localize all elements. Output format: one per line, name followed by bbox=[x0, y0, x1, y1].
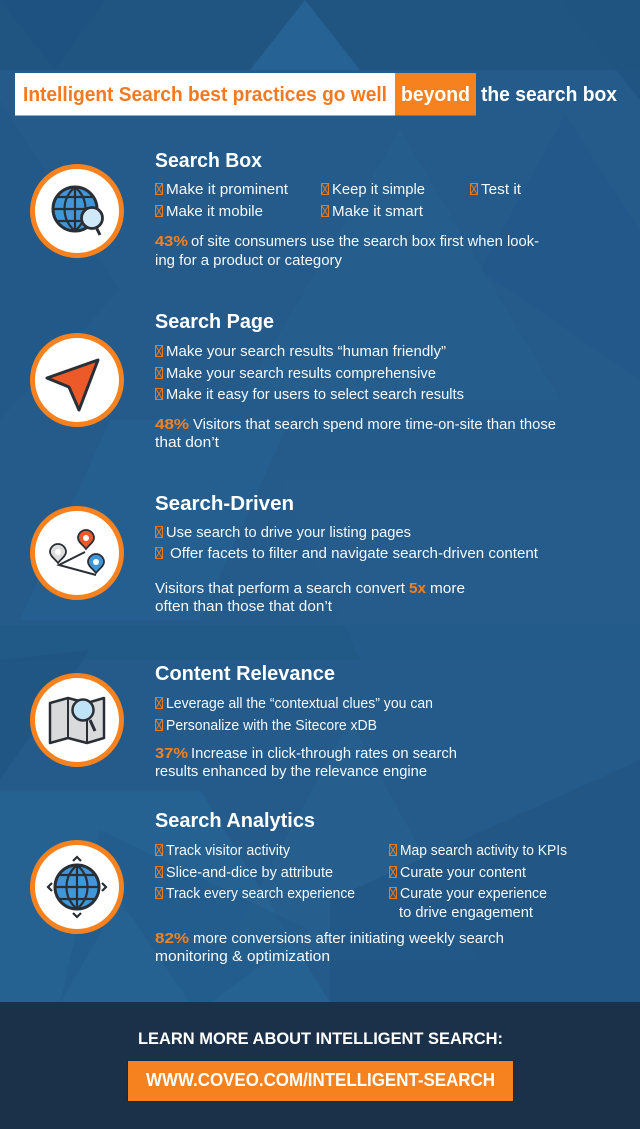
footer panel bbox=[0, 1002, 640, 1129]
section: Search Box: Make it smart bbox=[332, 203, 424, 220]
section: Search Page: 48% bbox=[155, 416, 189, 433]
section: Search Analytics: more conversions after initiating weekly search bbox=[193, 930, 504, 947]
section: Content Relevance: Increase in click-through rates on search bbox=[191, 745, 457, 762]
section: Content Relevance bbox=[155, 663, 457, 780]
section: Search Page: that don’t bbox=[155, 434, 220, 451]
section: Search Page: Search Page bbox=[155, 311, 274, 333]
section: Search Analytics: Map search activity to KPIs bbox=[400, 842, 567, 859]
section: Search-Driven: often than those that don’t bbox=[155, 598, 333, 615]
section: Search-Driven: Visitors that perform a search convert bbox=[155, 580, 406, 597]
section: Search Box: Make it prominent bbox=[166, 181, 289, 198]
section: Search-Driven: 5x bbox=[409, 580, 427, 597]
section: Search-Driven bbox=[155, 493, 539, 615]
footer heading: LEARN MORE ABOUT INTELLIGENT SEARCH: bbox=[138, 1029, 503, 1048]
section: Search Analytics: Curate your experience bbox=[400, 885, 547, 902]
title banner bbox=[15, 73, 617, 116]
call-to-action button: WWW.COVEO.COM/INTELLIGENT-SEARCH bbox=[146, 1070, 495, 1090]
section: Search-Driven: Offer facets to filter and navigate search-driven content bbox=[170, 545, 539, 562]
section: Search Analytics: to drive engagement bbox=[399, 904, 534, 921]
section: Search Analytics: monitoring & optimization bbox=[155, 948, 330, 965]
section: Search Box: Keep it simple bbox=[332, 181, 425, 198]
title banner: the search box bbox=[481, 84, 617, 106]
section: Search Box: of site consumers use the search box first when look- bbox=[191, 233, 539, 250]
icon: globe with magnifier bbox=[32, 166, 122, 256]
section: Content Relevance: 37% bbox=[155, 745, 188, 762]
icon: map pins bbox=[32, 508, 122, 598]
section: Content Relevance: Content Relevance bbox=[155, 663, 335, 685]
section: Search Page: Make your search results comprehensive bbox=[166, 365, 436, 382]
section: Search Box: ing for a product or category bbox=[155, 252, 342, 269]
section: Search Page bbox=[155, 311, 556, 451]
section: Search Box: Test it bbox=[481, 181, 522, 198]
section: Search Analytics bbox=[155, 810, 567, 965]
call-to-action button bbox=[128, 1060, 514, 1102]
section: Search-Driven: Search-Driven bbox=[155, 493, 294, 515]
section: Content Relevance: Leverage all the “contextual clues” you can bbox=[166, 695, 433, 712]
section: Search Box: 43% bbox=[155, 233, 188, 250]
section: Search Analytics: Curate your content bbox=[400, 864, 527, 881]
section: Search Box: Search Box bbox=[155, 150, 262, 172]
section: Search Page: Make your search results “human friendly” bbox=[166, 343, 446, 360]
section: Search Analytics: 82% bbox=[155, 930, 189, 947]
section: Content Relevance: Personalize with the Sitecore xDB bbox=[166, 717, 377, 734]
section: Search Analytics: Track visitor activity bbox=[166, 842, 290, 859]
icon: navigation arrow bbox=[32, 336, 122, 424]
icon: map with magnifier bbox=[32, 676, 122, 764]
title banner: Intelligent Search best practices go well bbox=[23, 84, 387, 106]
section: Search-Driven: Use search to drive your listing pages bbox=[166, 524, 411, 541]
section: Search Analytics: Search Analytics bbox=[155, 810, 315, 832]
section: Search Box: Make it mobile bbox=[166, 203, 263, 220]
section: Search Box bbox=[155, 150, 539, 269]
section: Search Page: Visitors that search spend more time-on-site than those bbox=[193, 416, 556, 433]
icon: globe with arrows bbox=[32, 842, 122, 932]
section: Content Relevance: results enhanced by the relevance engine bbox=[155, 763, 427, 780]
title banner: beyond bbox=[401, 84, 470, 106]
section: Search Analytics: Slice-and-dice by attribute bbox=[166, 864, 333, 881]
section: Search-Driven: more bbox=[430, 580, 465, 597]
section: Search Page: Make it easy for users to select search results bbox=[166, 386, 464, 403]
section: Search Analytics: Track every search experience bbox=[166, 885, 355, 902]
